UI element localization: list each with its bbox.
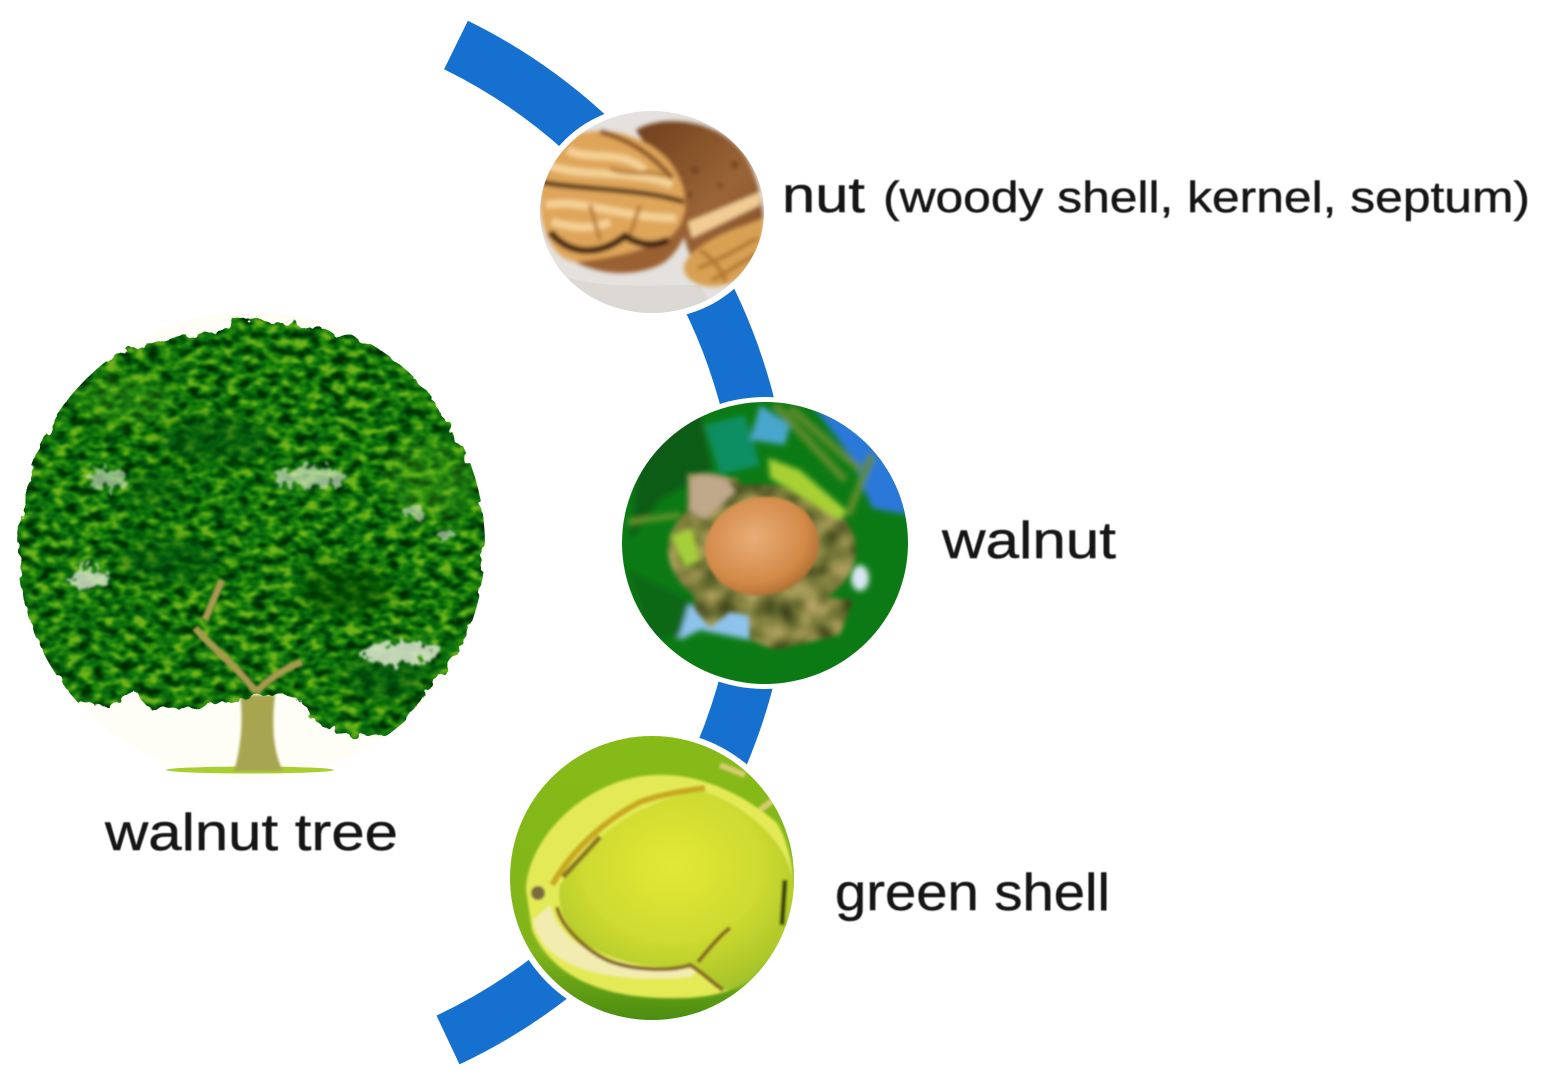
small kernel (684, 218, 764, 287)
icon: green shell (504, 730, 800, 1026)
pale outer flesh (526, 775, 796, 998)
label: nut parts (782, 167, 1530, 223)
icon: walnut tree (0, 300, 500, 779)
tree branches (195, 580, 302, 692)
woody shell half (636, 121, 763, 255)
label: nut parts: (woody shell, kernel, septum) (883, 173, 1530, 222)
leaf stems (775, 405, 872, 515)
lower right shading (723, 941, 779, 992)
label: walnut: walnut (941, 512, 1117, 570)
label: green shell: green shell (835, 864, 1110, 922)
tree foliage (17, 317, 485, 740)
crack lines (552, 788, 705, 885)
sky gaps in foliage (70, 467, 451, 664)
cream edge (533, 905, 700, 978)
inner fruit (559, 790, 795, 990)
kernel ball (704, 495, 820, 596)
white halo around green shell (504, 730, 800, 1026)
background sky and leaves (812, 405, 908, 515)
icon: nut with woody shell, kernel and septum (540, 111, 764, 314)
label: nut parts: nut (782, 167, 865, 223)
blue arc connector (448, 45, 765, 1040)
husk (668, 473, 856, 650)
septum (688, 192, 760, 238)
label: walnut tree: walnut tree (104, 804, 398, 862)
white halo around nut (534, 105, 770, 319)
kernel body (540, 131, 685, 262)
white halo around walnut (618, 397, 912, 689)
kernel outer rim (574, 224, 686, 276)
tree trunk (234, 695, 283, 771)
tree ground (166, 766, 334, 774)
icon: walnut in husk on branch (618, 397, 912, 690)
